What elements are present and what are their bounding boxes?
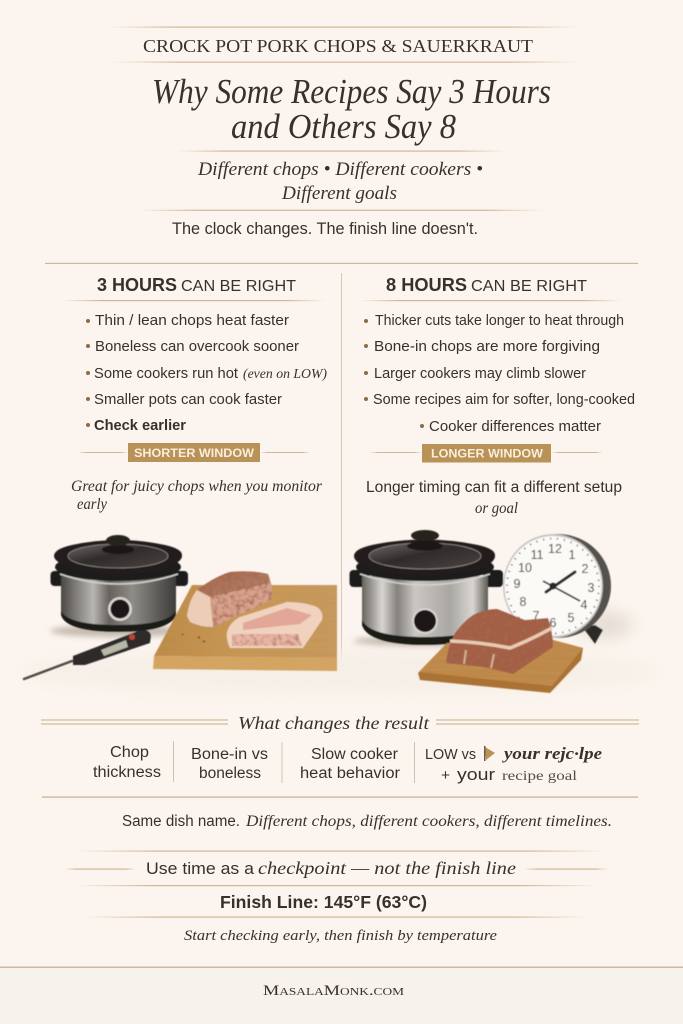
factor: bone-in vs boneless [191, 746, 268, 782]
brand: MasalaMonk.com: MasalaMonk.com [263, 983, 404, 999]
clock numerals: 7 [533, 609, 540, 623]
kicker: dish name: CROCK POT PORK CHOPS & SAUERKRAUT [143, 36, 533, 56]
illustration: short cook setup [24, 535, 337, 679]
list: reasons for 8 hours [364, 313, 635, 435]
icon: analog clock [503, 534, 633, 644]
factor: bone-in vs boneless: Bone-in vs [191, 746, 268, 763]
note: 8 hours [366, 479, 622, 517]
section: what changes the result [41, 713, 639, 784]
factor: low vs high and recipe goal [425, 744, 602, 784]
heading: 3 hours: CAN BE RIGHT [181, 278, 297, 295]
summary sentence [122, 813, 612, 830]
header block [105, 26, 580, 238]
icon: small cutting board [418, 640, 583, 693]
clock numerals: 10 [518, 561, 532, 575]
note: 3 hours [71, 478, 323, 513]
panel: 8 hours can be right [360, 275, 635, 517]
section heading: What changes the result [238, 713, 430, 733]
clock numerals: 4 [581, 598, 588, 612]
list: reasons for 8 hours: Larger cookers may climb slower [374, 365, 586, 382]
clock numerals [514, 542, 595, 630]
list: reasons for 3 hours: Check earlier [94, 417, 186, 434]
list: reasons for 3 hours: Some cookers run hot [94, 365, 239, 382]
icon: slow cooker large [350, 530, 503, 646]
factor: low vs high and recipe goal: your rejc·lpe [502, 744, 602, 763]
factor: slow cooker heat behavior: heat behavior [300, 765, 400, 782]
note: 3 hours: early [77, 496, 107, 513]
clock numerals: 2 [582, 562, 589, 576]
factor: slow cooker heat behavior: Slow cooker [311, 746, 398, 763]
section: finish line [65, 850, 608, 944]
badge: longer window [370, 444, 603, 462]
illustration: long cook setup [350, 530, 633, 693]
checkpoint message [146, 858, 516, 878]
clock numerals: 5 [568, 611, 575, 625]
note: 3 hours: Great for juicy chops when you monitor [71, 478, 323, 495]
badge: shorter window [78, 443, 310, 462]
summary sentence: Same dish name. [122, 813, 240, 830]
icon: slow cooker small [50, 535, 188, 637]
heading: 8 hours: CAN BE RIGHT [471, 278, 588, 295]
list: reasons for 8 hours: Bone-in chops are more forgiving [374, 338, 600, 355]
subtitle [197, 159, 483, 204]
checkpoint message: checkpoint — not the finish line [258, 858, 516, 878]
clock numerals: 6 [550, 616, 557, 630]
list: reasons for 3 hours: Smaller pots can cook faster [94, 391, 282, 408]
badge: shorter window: SHORTER WINDOW [134, 446, 255, 460]
factor: low vs high and recipe goal: recipe goal [502, 769, 577, 784]
factor: slow cooker heat behavior [300, 746, 400, 782]
clock numerals: 12 [548, 542, 562, 556]
factor: low vs high and recipe goal: your [457, 765, 495, 784]
list: reasons for 3 hours [86, 312, 327, 434]
summary sentence: Different chops, different cookers, different timelines. [245, 813, 612, 830]
factor: chop thickness [93, 744, 161, 781]
note: 8 hours: Longer timing can fit a different setup [366, 479, 622, 496]
list: reasons for 3 hours: (even on LOW) [243, 367, 327, 382]
subtitle: Different goals [281, 183, 397, 204]
main title [152, 72, 551, 146]
clock numerals: 8 [520, 595, 527, 609]
badge: longer window: LONGER WINDOW [431, 446, 544, 460]
clock numerals: 9 [514, 577, 521, 591]
main title: and Others Say 8 [231, 107, 456, 146]
icon: bone-in seared chop [446, 609, 553, 674]
icon: cutting board large [153, 585, 337, 671]
main title: Why Some Recipes Say 3 Hours [152, 72, 551, 111]
factor: chop thickness: Chop [110, 744, 149, 761]
checkpoint message: Use time as a [146, 859, 255, 878]
icon: raw pork chop [227, 602, 322, 648]
finish line temperature: Finish Line: 145°F (63°C) [220, 892, 427, 912]
clock numerals: 1 [569, 548, 576, 562]
icon: meat thermometer [24, 630, 151, 679]
list: reasons for 8 hours: Some recipes aim for softer, long-cooked [373, 392, 635, 408]
list: reasons for 8 hours: Cooker differences matter [429, 418, 601, 435]
factor: low vs high and recipe goal: LOW vs [425, 747, 476, 763]
factor: bone-in vs boneless: boneless [199, 765, 261, 782]
tagline: The clock changes. The finish line doesn't. [172, 220, 478, 238]
panel: 3 hours can be right [62, 275, 327, 513]
subtitle: Different chops • Different cookers • [197, 159, 483, 180]
heading: 3 hours: 3 HOURS [97, 275, 177, 295]
note: 8 hours: or goal [475, 500, 518, 517]
list: reasons for 3 hours: Thin / lean chops heat faster [95, 312, 289, 329]
factor: chop thickness: thickness [93, 764, 161, 781]
clock numerals: 3 [588, 581, 595, 595]
icon: thick pork chop [187, 571, 272, 627]
heading: 8 hours [386, 275, 588, 295]
ground shadow under illustrations [20, 650, 660, 694]
clock numerals: 11 [531, 548, 544, 562]
footer [0, 966, 683, 1024]
closing instruction: Start checking early, then finish by temperature [184, 928, 497, 944]
list: reasons for 8 hours: Thicker cuts take longer to heat through [375, 313, 624, 329]
list: reasons for 3 hours: Boneless can overcook sooner [95, 338, 299, 355]
heading: 8 hours: 8 HOURS [386, 275, 467, 295]
heading: 3 hours [97, 275, 297, 295]
factor: low vs high and recipe goal: + [441, 767, 450, 784]
